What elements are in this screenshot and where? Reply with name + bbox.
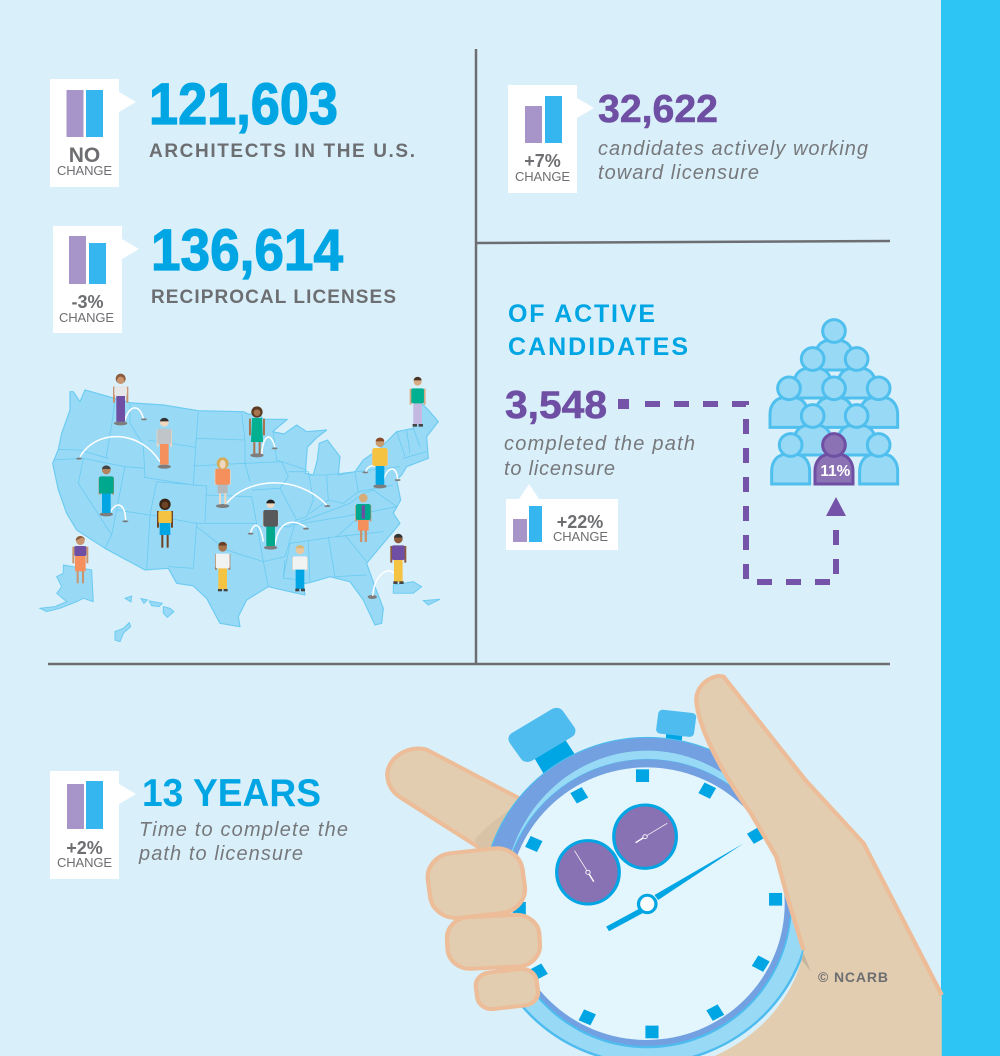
stat: candidates — [598, 88, 868, 184]
stat: architects: 121,603 — [149, 72, 338, 137]
stat: reciprocal licenses: RECIPROCAL LICENSES — [151, 287, 396, 308]
stat: 13 years: 13 YEARS — [142, 772, 321, 815]
side band — [941, 0, 1000, 1056]
map: migration arcs — [80, 408, 398, 596]
badge: +2% change: CHANGE — [57, 855, 112, 870]
stopwatch buttons — [505, 705, 697, 775]
people pyramid — [770, 320, 898, 484]
vertical divider — [475, 49, 477, 664]
heading: of active candidates — [508, 300, 688, 361]
stat: 13 years — [138, 772, 348, 865]
finger one — [425, 846, 528, 921]
stat: completed path: 3,548 — [505, 384, 607, 427]
person 11 — [355, 494, 371, 542]
horizontal divider bottom — [48, 663, 890, 665]
badge: no change — [50, 79, 136, 187]
copyright: © NCARB — [818, 969, 888, 985]
sub dial left — [557, 841, 619, 904]
person 12 — [372, 438, 388, 488]
badge: -3% change: -3% — [71, 292, 104, 312]
stat: architects — [149, 72, 415, 162]
badge: no change: NO — [69, 144, 100, 167]
map of the United States — [40, 374, 440, 642]
dashed arrow — [618, 399, 846, 582]
badge: +7% change — [508, 85, 594, 193]
person 1 — [113, 374, 128, 425]
person 5 — [157, 499, 173, 548]
stopwatch and hand — [387, 676, 942, 1056]
badge: -3% change: CHANGE — [59, 310, 114, 325]
map: hawaii and islands — [115, 582, 440, 642]
stat: architects: ARCHITECTS IN THE U.S. — [149, 141, 415, 162]
person 4 — [72, 536, 88, 583]
badge: -3% change — [53, 226, 139, 333]
badge: +2% change: +2% — [66, 838, 103, 858]
badge: +7% change: +7% — [524, 151, 561, 171]
heading: of active candidates: CANDIDATES — [508, 333, 688, 361]
stat: reciprocal licenses: 136,614 — [151, 218, 343, 283]
stat: 13 years: path to licensure — [138, 843, 303, 865]
badge: +22% change: +22% — [557, 512, 603, 532]
badge: +7% change: CHANGE — [515, 169, 570, 184]
person 2 — [157, 418, 172, 469]
main hand — [606, 843, 744, 931]
badge: +2% change — [50, 771, 136, 879]
badge: +22% change — [506, 484, 618, 550]
person 6 — [249, 406, 265, 457]
person 3 — [99, 465, 114, 516]
map: contiguous states — [53, 390, 438, 627]
people pyramid: 11% — [820, 463, 851, 480]
heading: of active candidates: OF ACTIVE — [508, 300, 655, 328]
badge: +22% change: CHANGE — [553, 529, 608, 544]
finger three — [474, 967, 540, 1011]
stat: reciprocal licenses — [151, 218, 396, 308]
index finger — [387, 748, 525, 852]
stat: candidates: candidates actively working — [598, 138, 868, 160]
person 13 — [410, 377, 426, 427]
person 9 — [215, 542, 230, 591]
map: state lines — [53, 399, 427, 587]
badge: no change: CHANGE — [57, 163, 112, 178]
person 10 — [292, 545, 308, 591]
map: alaska — [40, 565, 93, 612]
stat: completed path: to licensure — [504, 458, 615, 480]
stat: completed path: completed the path — [504, 433, 695, 455]
person 8 — [263, 500, 278, 550]
horizontal divider right — [476, 241, 890, 243]
stopwatch body — [483, 738, 812, 1056]
sub dial right — [614, 805, 676, 868]
person 14 — [390, 534, 406, 584]
stat: 13 years: Time to complete the — [139, 819, 348, 841]
finger two — [446, 914, 541, 970]
stat: completed path — [504, 384, 695, 480]
stopwatch ticks — [513, 769, 782, 1038]
person 7 — [215, 457, 231, 508]
finger shadow — [475, 805, 516, 857]
map: landing spots — [76, 418, 401, 599]
stat: candidates: toward licensure — [598, 162, 759, 184]
stat: candidates: 32,622 — [598, 88, 718, 131]
palm and thumb — [696, 676, 942, 1056]
